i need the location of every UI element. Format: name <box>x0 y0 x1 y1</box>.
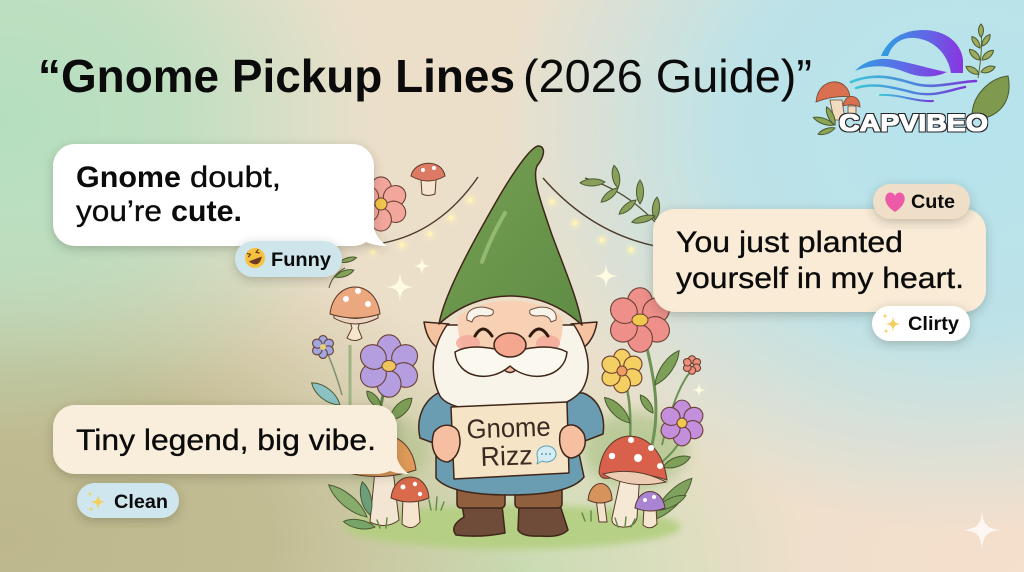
trousers <box>457 485 562 508</box>
nose <box>494 333 526 357</box>
leaf: blue <box>308 378 344 409</box>
speech bubble: Tiny legend: Tiny legend, big vibe. <box>76 424 376 457</box>
logo mushrooms <box>816 82 860 120</box>
eyebrows <box>467 307 556 322</box>
logo waves <box>851 77 976 101</box>
speech bubble: Gnome doubt: Gnome <box>76 161 181 194</box>
title: “Gnome Pickup Lines <box>38 50 515 102</box>
sign text: Gnome <box>466 412 551 444</box>
mushroom: small purple <box>635 492 665 528</box>
emoji: heart <box>885 193 905 212</box>
string lights right <box>543 178 655 255</box>
sign <box>451 402 569 479</box>
tag: Funny: Funny <box>271 250 331 271</box>
sign text <box>466 412 552 472</box>
sparkle: bottom right watermark <box>963 511 1001 549</box>
logo leaves left <box>812 106 838 137</box>
sign text: Rizz <box>480 440 533 472</box>
ears <box>424 322 597 352</box>
leaves under funny tag <box>329 256 357 288</box>
speech bubble: You just planted: yourself in my heart. <box>676 262 964 295</box>
logo cap <box>881 30 963 73</box>
emoji: rolling laughing <box>242 245 268 271</box>
tag: Cute: Cute <box>911 192 955 213</box>
beard <box>433 325 588 412</box>
speech bubble: You just planted: You just planted <box>676 226 903 259</box>
mushroom: big red <box>599 436 667 527</box>
leaves bottom right <box>648 473 697 525</box>
blue coat <box>419 393 604 495</box>
leaves bottom left <box>325 480 376 531</box>
stems right <box>626 340 690 462</box>
emoji: sparkles <box>882 313 901 334</box>
tag: Clirty: Clirty <box>908 314 959 335</box>
cheeks <box>456 335 560 351</box>
flower: purple right <box>658 400 706 446</box>
mouth <box>500 365 520 372</box>
eyes <box>475 329 548 336</box>
leaves behind speech bubble <box>364 389 416 424</box>
icon: chat bubble <box>537 446 556 464</box>
tag: Cute <box>873 184 970 219</box>
flower: pink right <box>606 288 674 352</box>
logo leaves top <box>965 24 996 78</box>
mushroom: small red left <box>391 477 429 528</box>
logo brim <box>855 59 947 76</box>
speech bubble: You just planted <box>653 209 986 312</box>
hands <box>432 425 585 462</box>
string lights left <box>368 177 478 257</box>
sparkles <box>386 257 706 397</box>
flower: small periwinkle <box>311 336 342 395</box>
flower: purple <box>356 335 422 410</box>
illustration: gnome holding a sign <box>419 146 604 536</box>
speech bubble: Gnome doubt: you’re <box>76 195 162 228</box>
boots <box>454 505 568 536</box>
logo: Capvibeo <box>812 24 1009 137</box>
speech bubble: Gnome doubt: cute. <box>171 195 242 228</box>
tag: Funny <box>235 241 342 277</box>
leaves right <box>601 348 692 471</box>
speech bubble: Tiny legend <box>53 405 409 474</box>
flower: yellow <box>599 349 645 393</box>
hat <box>439 146 582 325</box>
hat highlight <box>482 213 505 262</box>
face <box>458 300 563 368</box>
mushroom: peach <box>330 287 380 405</box>
tag: Clean <box>77 483 179 518</box>
flower: coral small <box>682 356 702 374</box>
logo oak leaf <box>972 76 1009 118</box>
illustration: garden behind the gnome <box>308 163 706 549</box>
logo wordmark: CAPVIBEO <box>839 110 988 137</box>
flower: pink top left <box>352 177 410 231</box>
title: (2026 Guide)” <box>523 50 812 102</box>
grass tufts <box>377 497 635 528</box>
speech bubble: Gnome doubt: doubt, <box>190 161 281 194</box>
speech bubble: Gnome doubt <box>53 144 387 246</box>
tag: Clirty <box>872 306 970 341</box>
moustache <box>455 347 567 376</box>
emoji: sparkles <box>87 491 106 512</box>
mushroom: large orange behind bubble <box>345 435 416 526</box>
branch top right <box>580 165 661 225</box>
title <box>38 50 812 102</box>
mushroom: small orange <box>588 484 612 522</box>
mushroom: small top <box>411 163 445 196</box>
tag: Clean: Clean <box>114 492 168 513</box>
